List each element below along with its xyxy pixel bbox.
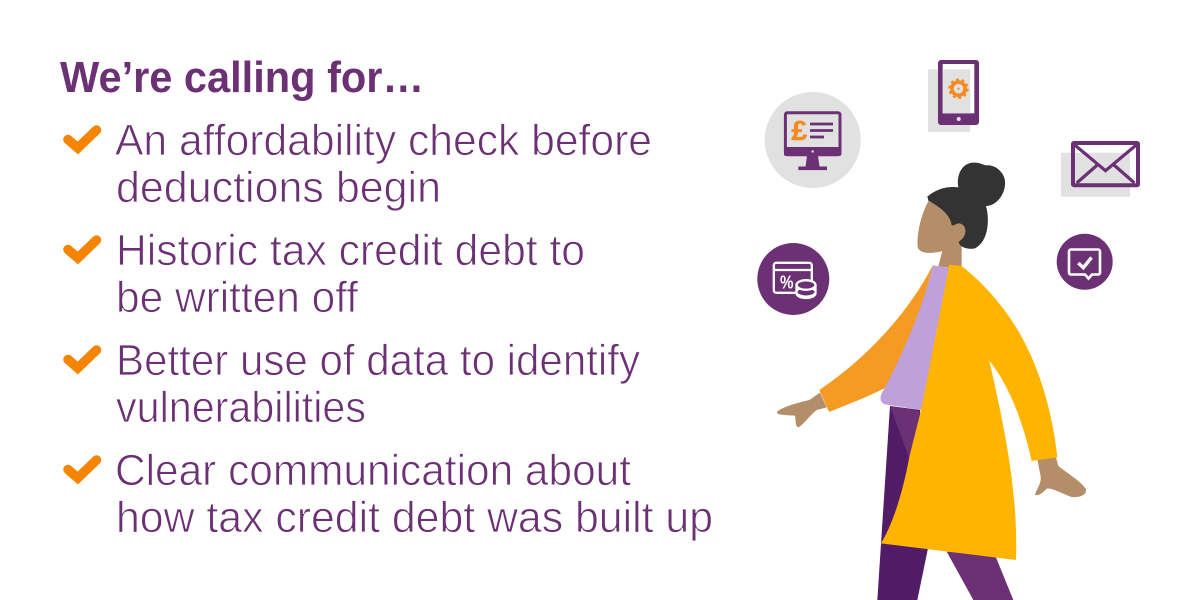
coat, top and sleeve [819, 265, 1057, 560]
icon: speech bubble with tick [1057, 234, 1113, 290]
title: We’re calling for… [60, 53, 424, 102]
list item 4 [68, 446, 713, 542]
icon: check mark 1 [68, 130, 96, 148]
icon: computer with pound sign [765, 92, 861, 188]
list item 3 [68, 336, 640, 432]
list item 1: deductions begin [116, 163, 441, 212]
icon: computer with pound sign: £ [792, 115, 808, 146]
hands [777, 393, 1086, 497]
icon: phone with gear [928, 60, 979, 132]
list item 2: Historic tax credit debt to [116, 226, 585, 275]
list item 4: Clear communication about [115, 446, 631, 495]
icon: check mark 3 [68, 350, 96, 368]
list item 4: how tax credit debt was built up [116, 493, 713, 542]
icon: check mark 4 [68, 460, 96, 478]
illustration: walking woman [777, 163, 1086, 600]
list item 3: Better use of data to identify [116, 336, 640, 385]
icon: percent and coins: % [780, 272, 794, 292]
legs [877, 406, 1013, 600]
list item 1 [68, 116, 652, 212]
icon: envelope [1061, 143, 1138, 197]
list item 2 [68, 226, 585, 322]
list item 1: An affordability check before [115, 116, 652, 165]
icon: percent and coins [757, 243, 829, 315]
neck and head [918, 163, 1005, 268]
list item 2: be written off [116, 273, 359, 322]
list item 3: vulnerabilities [116, 383, 366, 432]
icon: check mark 2 [68, 240, 96, 258]
